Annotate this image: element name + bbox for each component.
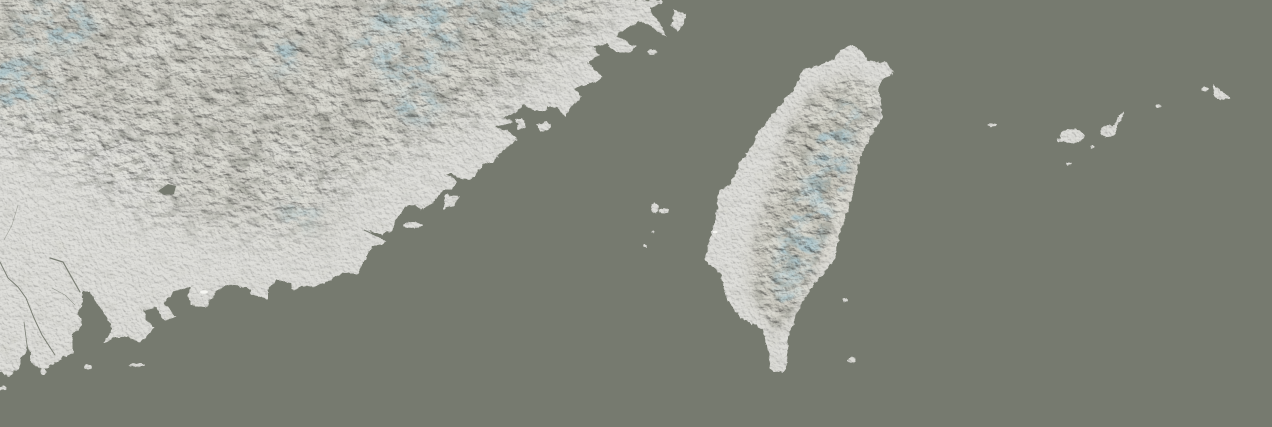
dark ridge flecks bbox=[0, 0, 882, 328]
rivers and lake bbox=[0, 184, 375, 355]
Taiwan foothill tint and pale plains bbox=[748, 74, 870, 330]
tan uplands tint bbox=[0, 0, 640, 233]
pale valley plains bbox=[51, 32, 307, 159]
pale ridge highlights bbox=[0, 0, 879, 316]
blue highland blotches bbox=[0, 0, 860, 302]
white urban patches bbox=[200, 231, 718, 294]
